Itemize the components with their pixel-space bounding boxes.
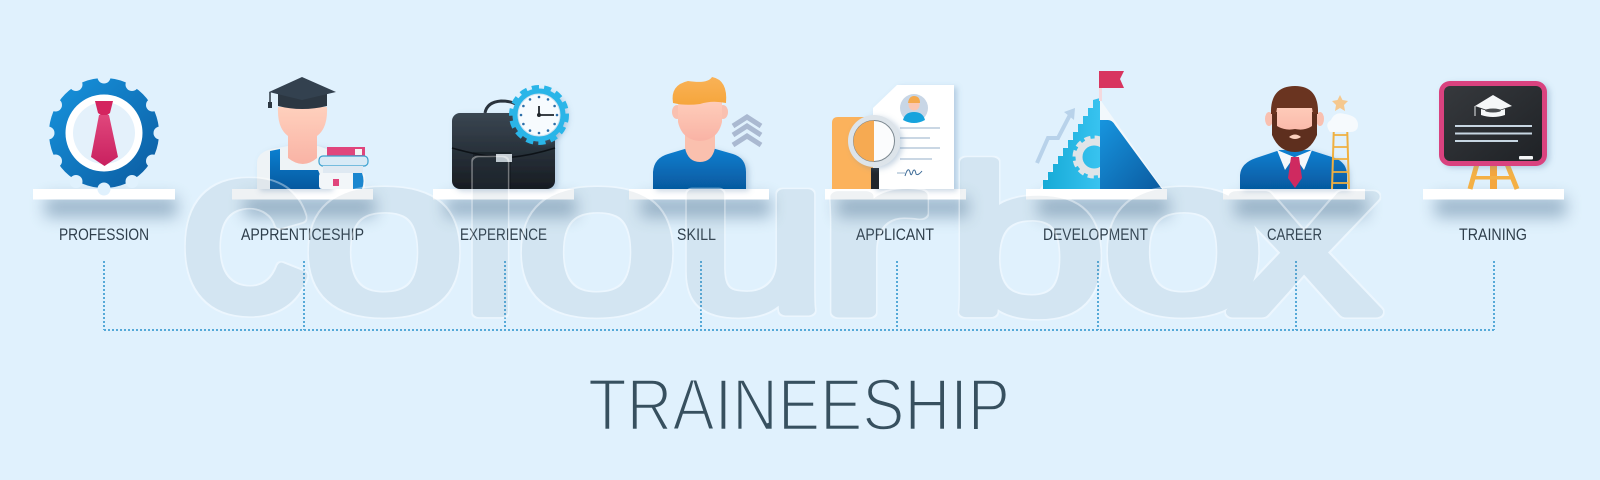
watermark: C — [183, 145, 308, 349]
title: TRAINEESHIP — [588, 365, 1010, 446]
infographic canvas — [33, 71, 1574, 430]
watermark: o — [517, 113, 677, 357]
icon: graduate with books (apprenticeship) — [257, 77, 368, 189]
icon: briefcase with clock gear (experience) — [452, 88, 566, 189]
watermark — [183, 113, 1379, 359]
shelves — [33, 189, 1564, 200]
label: profession: PROFESSION — [59, 226, 149, 244]
watermark: x — [1230, 115, 1379, 359]
icon: gear with necktie (profession) — [42, 70, 166, 196]
label: training: TRAINING — [1459, 226, 1527, 244]
label: career: CAREER — [1267, 226, 1322, 244]
icon: person with chevrons (skill) — [653, 77, 761, 189]
shelf shadows — [45, 197, 1566, 217]
watermark: r — [817, 114, 925, 359]
icon: bearded man with ladder (career) — [1240, 86, 1358, 189]
watermark: o — [304, 113, 464, 357]
label: development: DEVELOPMENT — [1043, 226, 1148, 244]
icon: folder, CV and magnifier (applicant) — [832, 85, 954, 189]
label: apprenticeship: APPRENTICESHIP — [241, 226, 364, 244]
watermark: o — [1103, 113, 1263, 357]
label: applicant: APPLICANT — [856, 226, 934, 244]
dotted connector lines — [104, 261, 1494, 330]
icon: chalkboard on easel (training) — [1439, 81, 1547, 189]
watermark: u — [676, 113, 826, 357]
icon: mountain with flag and gear (development) — [1037, 71, 1163, 189]
watermark: b — [948, 125, 1106, 356]
watermark: l — [462, 126, 519, 357]
label: skill: SKILL — [677, 226, 716, 244]
label: experience: EXPERIENCE — [460, 226, 547, 244]
